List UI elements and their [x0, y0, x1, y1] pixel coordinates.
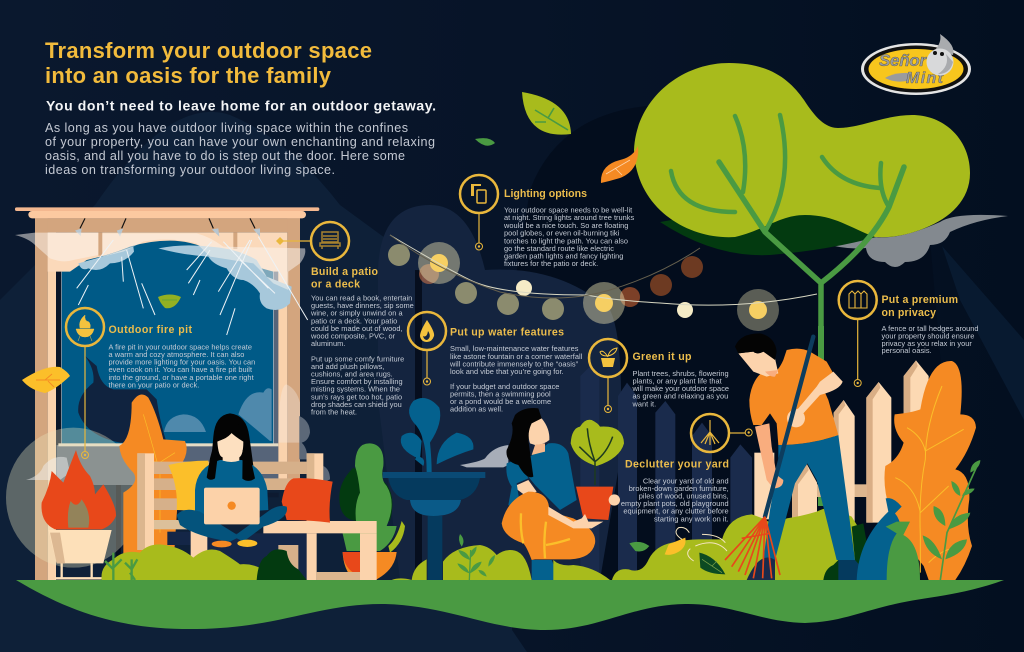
callout: lighting options	[460, 175, 635, 268]
callout: build a patio: wine, or simply unwind on a	[310, 308, 403, 318]
string lights	[388, 235, 817, 331]
callout: declutter your yard: starting any work on it.	[654, 514, 729, 524]
yellow pillow	[168, 461, 210, 512]
inner flame	[68, 499, 89, 528]
callout: outdoor fire pit: A fire pit in your outdoor space helps create	[108, 342, 252, 352]
picket fence	[754, 360, 929, 526]
callout: outdoor fire pit: even cook on it. You can have a fire pit built	[108, 365, 252, 374]
callout: build a patio: guests, have dinners, sip some	[311, 301, 414, 310]
callout: put a premium on privacy: A fence or tall hedges around	[882, 324, 979, 333]
fallen leaves	[629, 527, 727, 574]
callout: declutter your yard	[621, 414, 752, 524]
man with rake	[720, 333, 920, 580]
lime bushes	[101, 544, 277, 580]
tree	[634, 63, 970, 350]
callout: lighting options: Your outdoor space needs to be well-lit	[504, 206, 632, 214]
grey cloud right of post	[299, 416, 330, 483]
bench	[137, 453, 377, 580]
woman with laptop	[177, 413, 287, 547]
red pot	[576, 487, 613, 520]
intro paragraph: As long as you have outdoor living space within the confines	[45, 121, 408, 135]
intro paragraph: oasis, and all you have to do is step out the door. Here some	[45, 149, 405, 163]
callout: water features: addition as well.	[450, 405, 503, 414]
orange leaf plant right	[884, 361, 976, 580]
white translucent clouds	[15, 233, 305, 290]
callout: build a patio: from the heat.	[311, 408, 357, 416]
orange plant behind bench	[119, 394, 187, 566]
logo	[861, 34, 971, 95]
scene middle: bushes and fountain	[101, 398, 485, 580]
callout: outdoor fire pit: a warm and cozy atmosphere. It can also	[108, 350, 244, 359]
callout: water features: or a pond would be a welcome	[450, 397, 551, 406]
callout: build a patio: cushions, and area rugs.	[311, 370, 393, 378]
callout: green it up: Plant trees, shrubs, flowering	[632, 369, 729, 378]
callout: build a patio: Put up some comfy furniture	[311, 354, 404, 364]
callout: put a premium on privacy: Put a premium	[882, 294, 958, 306]
figure	[502, 408, 595, 580]
callout: green it up: as green and relaxing as you	[632, 392, 728, 401]
callout: water features: like astone fountain or a corner waterfall	[450, 352, 583, 361]
callout: put a premium on privacy: your property should ensure	[882, 332, 974, 340]
arm and hands	[548, 494, 620, 528]
leaf: yellow left	[22, 367, 70, 393]
callout: water features: If your budget and outdoor space	[450, 382, 559, 391]
callout: green it up: plants, or any plant life that	[632, 376, 722, 386]
callout: build a patio: Build a patio	[311, 266, 379, 278]
rubbish bags	[857, 498, 920, 580]
callout: water features	[408, 312, 583, 414]
title	[45, 38, 372, 88]
trunk lower	[818, 326, 824, 506]
callout: declutter your yard: equipment, or any clutter before	[623, 506, 729, 516]
ground	[16, 580, 1004, 630]
callout: build a patio: misting systems. When the	[311, 384, 400, 394]
callout: build a patio: could be made out of wood,	[311, 324, 403, 333]
callout: declutter your yard: Clear your yard of old and	[643, 476, 729, 486]
plant in red pot	[571, 420, 624, 485]
callout: lighting options: garden path lights and fancy lighting	[504, 252, 623, 260]
grey cloud by fountain	[460, 445, 508, 467]
scene right: fence	[580, 326, 980, 580]
blue clouds in window	[78, 245, 292, 310]
pants	[763, 435, 855, 560]
callout: build a patio: patio or a deck. Your patio	[311, 316, 397, 326]
callout: green it up: will make your outdoor space	[632, 384, 729, 393]
floating leaf: small green	[475, 138, 495, 146]
logo: Mint	[906, 70, 944, 87]
callout: declutter your yard: Declutter your yard	[625, 459, 729, 471]
grey cloud behind tree	[823, 215, 1008, 267]
callout: water features: will contribute immensely to the “oasis”	[449, 359, 579, 368]
title: into an oasis for the family	[45, 63, 332, 88]
window clouds	[164, 388, 272, 441]
left small bush	[392, 559, 427, 580]
flames	[41, 450, 116, 529]
callout: outdoor fire pit: Outdoor fire pit	[108, 324, 192, 336]
intro paragraph: ideas on transforming your outdoor living space.	[45, 163, 335, 177]
bushes and sprig	[443, 534, 610, 580]
callout: lighting options: would be a nice touch. So are floating	[503, 221, 628, 230]
callout: build a patio: You can read a book, entertain	[311, 294, 412, 302]
green sprig	[923, 460, 980, 580]
callout: outdoor fire pit: there on your patio or deck.	[108, 380, 199, 390]
callout: outdoor fire pit: into the ground, or have a portable one right	[108, 373, 254, 382]
logo: Señor	[879, 51, 927, 70]
callout: outdoor fire pit: provide more lighting for your oasis. You can	[108, 358, 255, 366]
intro paragraph: of your property, you can have your own enchanting and relaxing	[45, 135, 435, 149]
red pillow	[282, 478, 333, 523]
lime bushes	[720, 508, 860, 580]
pergola	[15, 207, 319, 585]
callout: green it up: Green it up	[632, 351, 692, 363]
fire pot	[48, 530, 112, 563]
callout: lighting options: Lighting options	[504, 188, 587, 200]
bench with woman and laptop	[137, 413, 377, 580]
callout: put a premium on privacy: on privacy	[882, 307, 936, 319]
subtitle: You don’t need to leave home for an outdoor getaway.	[46, 98, 436, 114]
callout: lighting options: pool globes, or even oil-burning tiki	[504, 228, 620, 238]
lime bush by fence	[612, 514, 765, 580]
dark tree silhouette	[78, 356, 167, 443]
rake head shadow	[747, 557, 775, 580]
callout: put a premium on privacy	[839, 281, 979, 386]
callout: water features: permits, then a swimming pool	[450, 390, 551, 398]
torso and head	[735, 333, 843, 488]
intro paragraph	[45, 121, 435, 177]
fire glow	[6, 428, 141, 568]
callout: water features: Small, low-maintenance water features	[450, 344, 579, 353]
callout: lighting options: torches to light the path. You can also	[504, 236, 628, 246]
seedling	[105, 553, 137, 580]
callout: declutter your yard: piles of wood, unused bins,	[639, 492, 729, 500]
scene left: fire pit and plants behind bench	[6, 356, 405, 579]
potted plant	[339, 443, 405, 579]
callout: build a patio: sun’s rays get too hot, patio	[311, 392, 402, 402]
callout: put a premium on privacy: personal oasis.	[882, 346, 932, 355]
callout: water features: look and vibe that you’re going for.	[450, 367, 564, 376]
callout: lighting options: go the standard route like electric	[504, 244, 614, 253]
callout: outdoor fire pit	[66, 308, 255, 458]
callout: put a premium on privacy: privacy as you relax in your	[882, 339, 972, 348]
shoe and dark bush	[823, 523, 873, 580]
birdbath fountain	[383, 398, 485, 580]
title: Transform your outdoor space	[45, 38, 372, 63]
dark bush	[257, 549, 307, 580]
woman with plant	[443, 408, 624, 580]
callout: build a patio: wood composite, PVC, or	[310, 332, 396, 340]
callout: build a patio: or a deck	[311, 278, 360, 290]
floating leaf: orange	[601, 146, 638, 183]
callout: declutter your yard: broken-down garden furniture,	[629, 484, 729, 493]
leaf in window	[158, 294, 181, 308]
spot rays	[77, 237, 308, 335]
dark fence	[580, 366, 752, 579]
floating leaf: green large	[522, 92, 571, 135]
callout: build a patio: Ensure comfort by installing	[311, 377, 403, 386]
callout: green it up: want it.	[632, 399, 656, 408]
callout: build a patio: aluminum.	[311, 339, 345, 348]
rake	[725, 337, 813, 578]
callout: lighting options: at night. String lights around tree trunks	[504, 213, 635, 222]
callout: water features: Put up water features	[450, 327, 564, 339]
callout: green it up	[589, 339, 729, 412]
callout: lighting options: fixtures for the patio or deck.	[504, 259, 598, 268]
right post haze	[278, 384, 300, 443]
callout: build a patio: and add plush pillows,	[311, 362, 384, 371]
callout: declutter your yard: empty plant pots, old playground	[621, 499, 729, 508]
glow cloud	[26, 457, 70, 480]
callout: build a patio	[276, 222, 414, 416]
callout: build a patio: drop shades can shield you	[311, 400, 402, 409]
